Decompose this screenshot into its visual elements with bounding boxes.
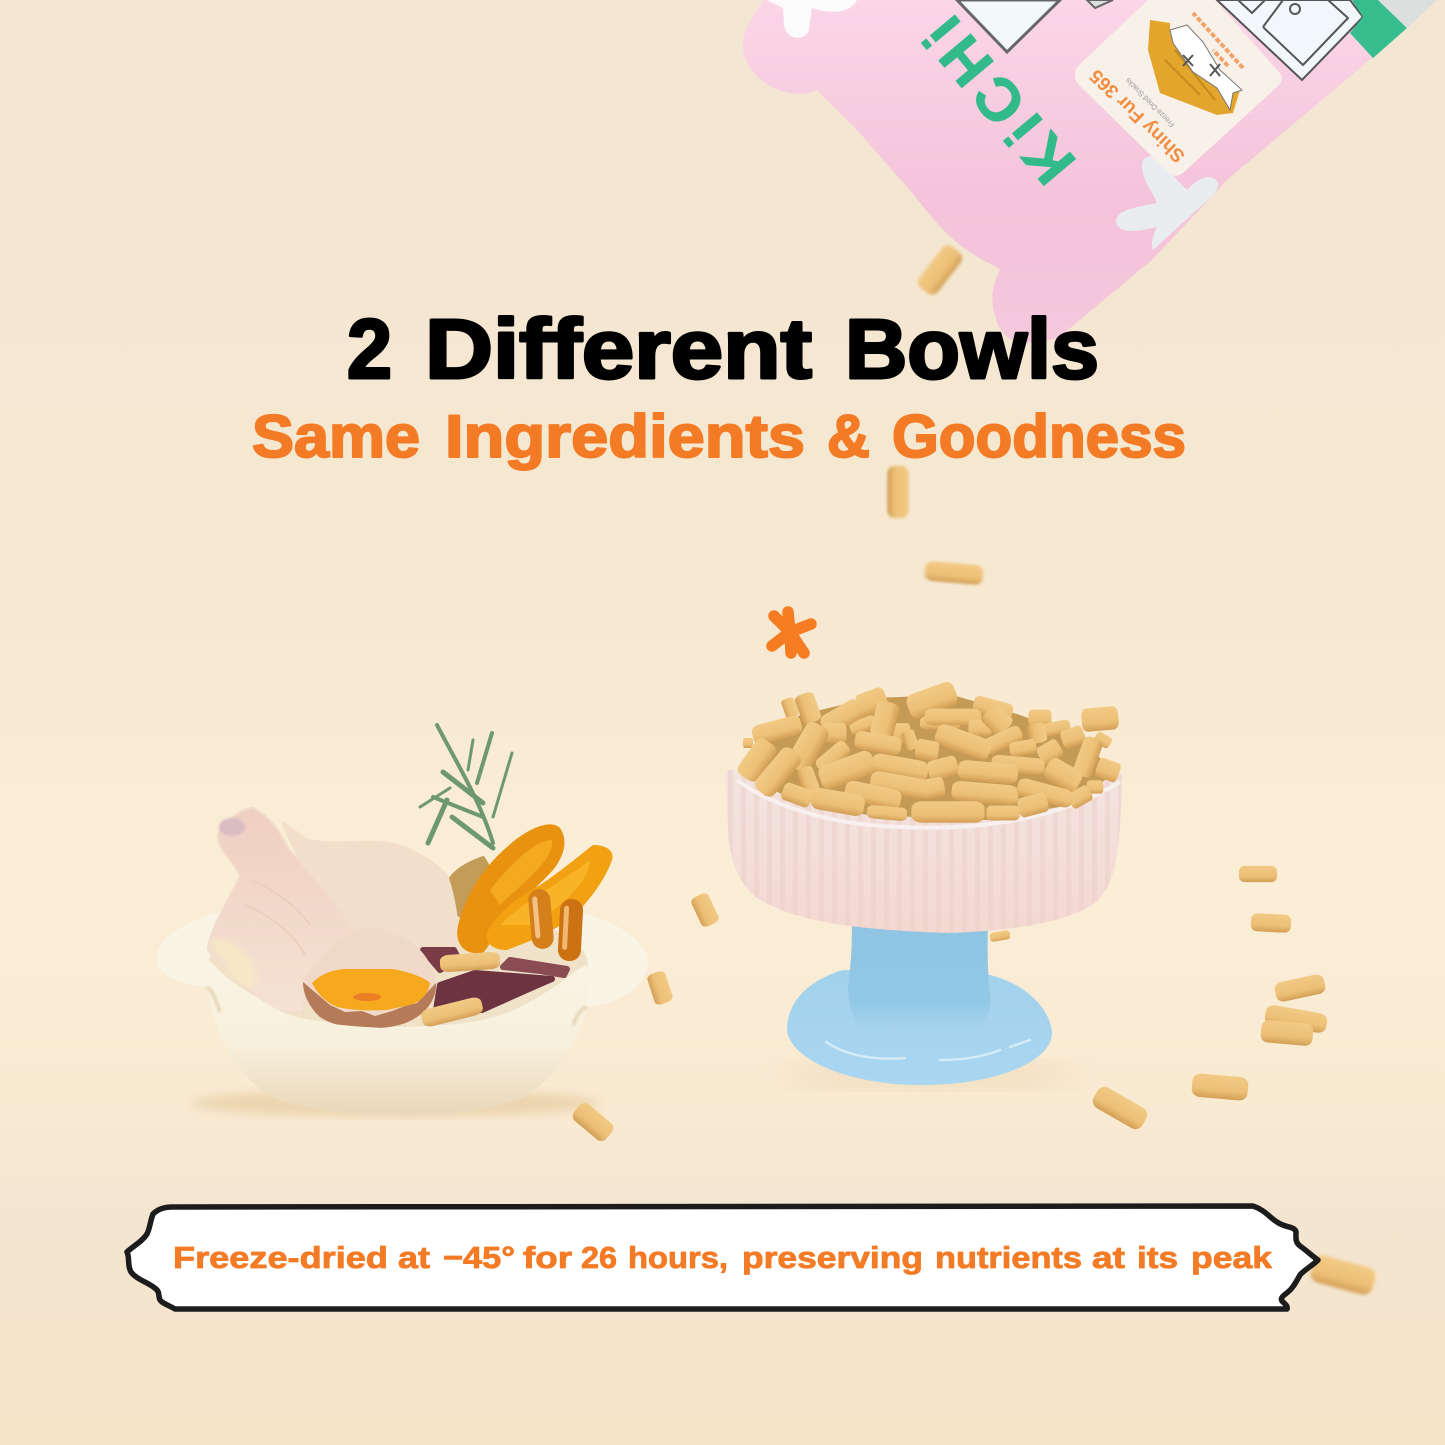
banner text: its: [1137, 1240, 1178, 1275]
banner text: preserving: [742, 1240, 923, 1275]
pouch flower bottom: [1116, 156, 1218, 250]
hidden kibble: [989, 930, 1011, 942]
pink bowl: [725, 770, 1122, 933]
pouch window right: [1217, 0, 1363, 80]
turmeric root: [446, 858, 495, 917]
title: Bowls: [845, 302, 1099, 396]
shadow: [780, 1061, 1080, 1089]
banner text: at: [1092, 1240, 1125, 1275]
pouch corner: [1378, 0, 1437, 28]
callout banner: [127, 1206, 1318, 1309]
banner text: hours,: [628, 1240, 728, 1275]
pouch flower top: [767, 0, 857, 38]
subtitle: Same: [252, 403, 420, 470]
chicken right: [283, 823, 457, 950]
bowl interior: [208, 903, 588, 1027]
title: [347, 302, 1099, 396]
label food: [1148, 20, 1240, 115]
banner text: nutrients: [935, 1240, 1082, 1275]
liver: [423, 950, 567, 1010]
icon: asterisk: [772, 612, 811, 653]
banner text: [173, 1240, 1273, 1275]
bowl front wall: [207, 960, 587, 1115]
pouch brand: KiCHi: [911, 3, 1088, 197]
falling kibble: [887, 242, 984, 585]
kibble pile: [735, 680, 1122, 823]
pedestal foot: [787, 970, 1052, 1085]
chicken left: [208, 808, 357, 1013]
pouch label: [1075, 0, 1282, 176]
kibble in front: [420, 996, 484, 1028]
subtitle: [252, 403, 1186, 470]
panel: kibble bowl: [725, 680, 1122, 1089]
banner text: 26: [581, 1240, 617, 1275]
kibble on liver: [439, 951, 501, 973]
banner text: −45°: [443, 1240, 515, 1275]
rosemary: [420, 725, 512, 848]
pouch top detail: [1087, 0, 1113, 8]
label subtitle: Freeze-Dried Snacks: [1123, 76, 1176, 129]
shadow: [190, 1089, 600, 1117]
banner text: for: [523, 1240, 572, 1275]
pouch window left: [957, 0, 1060, 52]
label title: Shiny Fur 365: [1086, 65, 1189, 166]
pedestal stem: [848, 925, 990, 1030]
handle shadows: [207, 987, 587, 1025]
panel: raw ingredients bowl: [157, 725, 648, 1117]
label cat: [1170, 25, 1242, 110]
subtitle: Ingredients: [445, 403, 805, 470]
subtitle: Goodness: [892, 403, 1186, 470]
subtitle: &: [827, 403, 870, 470]
egg: [303, 928, 436, 1029]
pouch green stripe: [1350, 0, 1407, 58]
banner text: Freeze-dried: [173, 1240, 388, 1275]
turmeric slice 1: [457, 824, 564, 953]
banner text: at: [398, 1240, 430, 1275]
banner text: peak: [1191, 1240, 1273, 1275]
capsules: [527, 888, 584, 962]
scattered kibble: [570, 866, 1378, 1297]
turmeric slice 2: [487, 845, 613, 950]
bowl back and handles: [157, 913, 648, 1115]
product pouch: [743, 0, 1437, 342]
title: 2: [347, 302, 392, 396]
title: Different: [425, 302, 812, 396]
